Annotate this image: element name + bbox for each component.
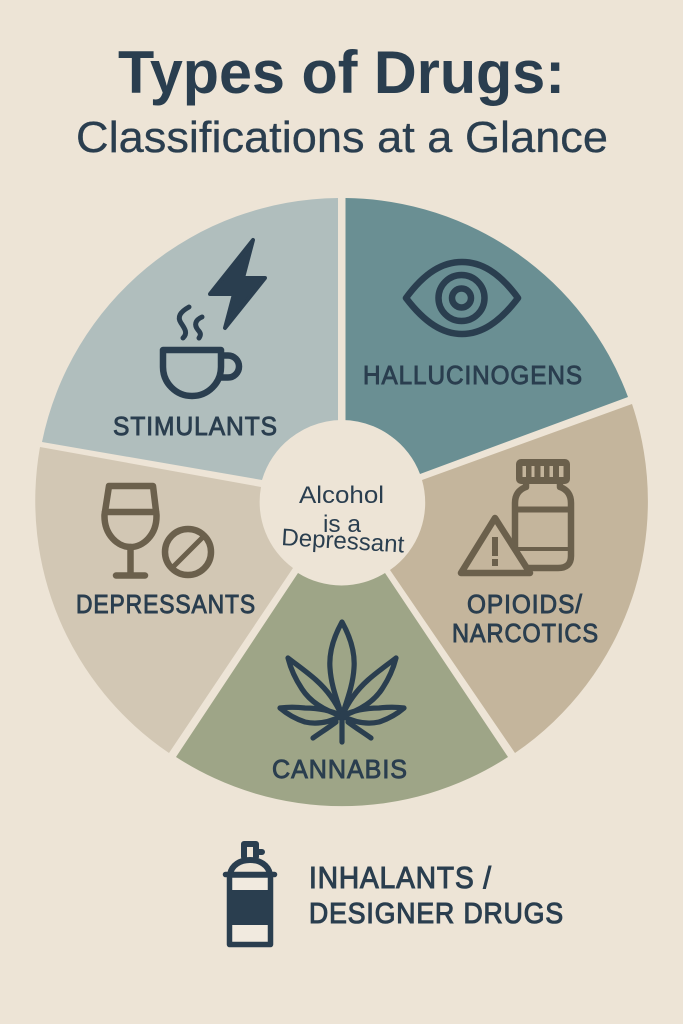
panel: stimulants xyxy=(42,198,338,480)
panel: hallucinogens xyxy=(346,198,628,474)
icon: prohibition sign xyxy=(165,529,211,575)
icon: spray can xyxy=(226,844,274,944)
legend: inhalants / designer drugs xyxy=(226,844,564,944)
label: depressants: DEPRESSANTS xyxy=(76,589,256,619)
legend label: designer drugs: DESIGNER DRUGS xyxy=(309,898,564,930)
hub text: Depressant xyxy=(281,524,405,559)
hub text: is a xyxy=(323,511,362,538)
heading: main title: Types of Drugs: xyxy=(118,39,565,106)
icon: pill bottle with warning xyxy=(461,462,571,573)
panel: depressants xyxy=(35,447,293,753)
center hub xyxy=(260,420,424,584)
icon: cannabis leaf xyxy=(280,622,404,742)
panel: cannabis xyxy=(176,573,508,806)
legend label: inhalants: INHALANTS / xyxy=(309,860,492,895)
label: cannabis: CANNABIS xyxy=(272,754,408,784)
title xyxy=(76,39,608,162)
label: stimulants: STIMULANTS xyxy=(113,411,278,441)
label: hallucinogens: HALLUCINOGENS xyxy=(363,360,583,390)
heading: subtitle: Classifications at a Glance xyxy=(76,113,608,162)
hub text xyxy=(281,482,405,559)
hub text: Alcohol xyxy=(299,482,384,509)
label: narcotics: NARCOTICS xyxy=(452,618,599,648)
pie chart xyxy=(35,198,648,806)
icon: lightning bolt xyxy=(210,240,265,328)
label: opioids: OPIOIDS/ xyxy=(467,589,583,619)
panel: opioids / narcotics xyxy=(390,404,648,753)
icon: wine glass xyxy=(104,486,157,576)
icon: coffee cup xyxy=(163,307,239,396)
icon: eye xyxy=(406,262,518,334)
